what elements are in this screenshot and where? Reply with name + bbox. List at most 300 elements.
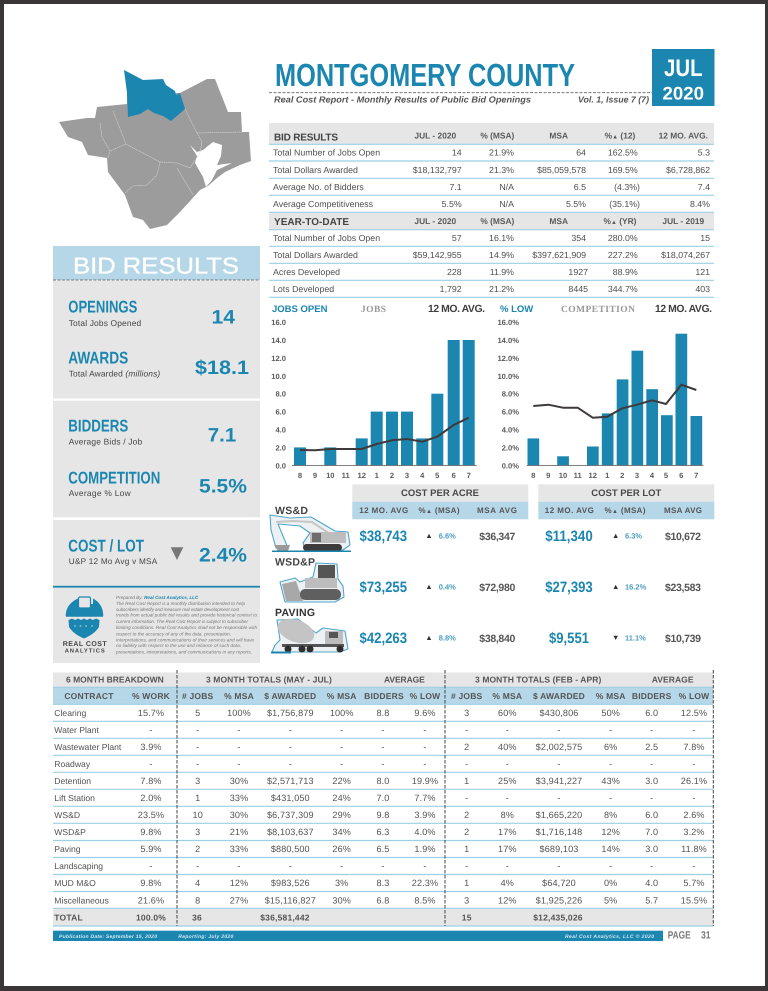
row: Total Number of Jobs Open <box>273 147 380 157</box>
row: roadway: - <box>149 759 153 769</box>
row <box>273 267 710 277</box>
chart: percent low competition: 10 <box>559 471 567 480</box>
row: Average No. of Bidders <box>273 182 364 192</box>
panel heading: BID RESULTS <box>73 252 239 278</box>
row: lift station <box>54 793 696 803</box>
row: WS&D: 6.0 <box>645 810 658 820</box>
column headers: % LOW <box>410 691 441 701</box>
column headers: % MSA <box>224 691 254 701</box>
row: 15 <box>700 233 710 243</box>
stat: cost per lot: U&P 12 Mo Avg v MSA <box>69 557 158 566</box>
row: MUD M&O: 8.3 <box>376 878 390 888</box>
row: detention: 7.8% <box>140 776 162 786</box>
stat: openings: Total Jobs Opened <box>69 318 142 328</box>
column headers: CONTRACT <box>64 691 114 701</box>
row <box>273 199 710 209</box>
footer bar: Real Cost Analytics, LLC © 2020 <box>565 934 654 940</box>
row: water plant: - <box>289 725 292 735</box>
row: landscaping: - <box>149 861 153 871</box>
row: lift station: - <box>692 793 696 803</box>
row: miscellaneous <box>54 896 707 906</box>
row: WSD&P: 2 <box>464 827 469 837</box>
row: paving: $9,551 <box>549 630 589 647</box>
map: Houston region with Montgomery County highlighted <box>59 70 251 229</box>
row: paving: 5.9% <box>140 844 162 854</box>
column headers: MSA AVG <box>664 506 702 515</box>
row: (4.3%) <box>614 182 640 192</box>
row: clearing: $430,806 <box>540 708 578 718</box>
row: water plant: - <box>465 725 468 735</box>
row: miscellaneous: 8.5% <box>414 896 436 906</box>
row: landscaping: - <box>506 861 509 871</box>
row: WS&D: 30% <box>230 810 248 820</box>
row: paving <box>271 607 701 654</box>
chart: jobs open: 6.0 <box>275 408 286 416</box>
row: wastewater plant: 2 <box>464 742 469 752</box>
column headers: MSA AVG <box>477 506 517 515</box>
row: landscaping: - <box>692 861 696 871</box>
table: 6 month breakdown <box>53 670 713 926</box>
row: WSD&P: 12% <box>601 827 620 837</box>
row: 5.5% <box>566 199 586 209</box>
group headers: AVERAGE <box>652 674 694 684</box>
page number: 31 <box>701 930 711 942</box>
chart: percent low competition: 6 <box>679 471 683 480</box>
chart: percent low competition: 2 <box>620 471 624 480</box>
row: water plant: - <box>692 725 696 735</box>
row: N/A <box>499 199 514 209</box>
row: 7.1 <box>449 182 462 192</box>
stat: competition <box>68 468 247 498</box>
row: 6.5 <box>574 182 586 192</box>
row: 64 <box>576 147 586 157</box>
stat: cost per lot: 2.4% <box>199 544 247 566</box>
row: 8445 <box>568 284 588 294</box>
chart: jobs open: 5 <box>435 471 440 480</box>
row: wastewater plant <box>54 742 705 752</box>
chart: jobs open <box>271 304 485 480</box>
header: year to date: JUL - 2020 <box>414 216 457 226</box>
header: bid results <box>274 130 708 144</box>
column headers: 12 MO. AVG <box>359 506 408 515</box>
row: 354 <box>571 233 586 243</box>
header: bid results: % (MSA) <box>480 130 514 140</box>
chart: percent low competition: 0.0% <box>502 461 519 470</box>
heading: cost per lot: COST PER LOT <box>591 488 661 499</box>
stat: bidders <box>68 416 236 447</box>
row: WS&D: 23.5% <box>138 810 164 820</box>
logo text: REAL COST <box>63 641 107 648</box>
row: wastewater plant: 2.5 <box>645 742 658 752</box>
chart heading: JOBS OPEN <box>272 304 328 315</box>
column headers: %▲ (MSA) <box>418 506 460 515</box>
row: roadway: - <box>423 759 427 769</box>
disclaimer text: respect to the accuracy of any of the data, presentation, <box>116 632 231 636</box>
row: WS&D: 6.6% <box>439 532 456 541</box>
row: WSD&P: 16.2% <box>625 583 647 592</box>
row: WSD&P: $8,103,637 <box>267 827 314 837</box>
header: year to date: JUL - 2019 <box>662 216 705 226</box>
row: wastewater plant: - <box>340 742 343 752</box>
chart: jobs open: 2 <box>390 471 394 480</box>
chart: percent low competition: 12.0% <box>497 354 519 363</box>
row: WSD&P: $72,980 <box>479 582 515 594</box>
row: Average Competitiveness <box>273 199 374 209</box>
row: MUD M&O: 4 <box>195 878 200 888</box>
row: lift station: Lift Station <box>54 793 95 803</box>
row: WSD&P: 3.2% <box>683 827 705 837</box>
row: paving: 8.8% <box>439 634 456 643</box>
row: total: $36,581,442 <box>260 912 310 922</box>
column headers: 12 MO. AVG <box>545 506 594 515</box>
row: MUD M&O: MUD M&O <box>54 878 96 888</box>
row: clearing: 12.5% <box>681 708 707 718</box>
row: miscellaneous: 8 <box>195 896 200 906</box>
stat: awards <box>68 349 249 379</box>
chart: percent low competition: 16.0% <box>497 318 519 327</box>
row: miscellaneous: $15,116,827 <box>265 896 316 906</box>
row: total: $12,435,026 <box>533 912 583 922</box>
column headers <box>359 506 702 515</box>
row: WSD&P: 7.0 <box>645 827 658 837</box>
row <box>273 250 710 260</box>
row: water plant: - <box>149 725 153 735</box>
row: clearing: 15.7% <box>138 708 164 718</box>
row: paving: 11.8% <box>681 844 707 854</box>
row: paving: 17% <box>498 844 517 854</box>
row: 8.4% <box>690 199 710 209</box>
row: MUD M&O: 1 <box>464 878 469 888</box>
row: 88.9% <box>613 267 638 277</box>
row: detention: 43% <box>601 776 620 786</box>
row: wastewater plant: - <box>237 742 241 752</box>
row: MUD M&O <box>54 878 705 888</box>
chart: jobs open: 14.0 <box>271 336 286 345</box>
row: detention: $3,941,227 <box>536 776 582 786</box>
table: bid results <box>269 123 714 297</box>
row: WS&D: $10,672 <box>665 531 701 543</box>
row: miscellaneous: 27% <box>230 896 248 906</box>
row: paving: 26% <box>332 844 351 854</box>
header: year to date <box>274 216 705 228</box>
row: roadway: - <box>289 759 292 769</box>
row: lift station: 1 <box>195 793 200 803</box>
chart: jobs open: 1 <box>375 471 380 480</box>
chart heading <box>500 304 712 315</box>
row: detention: 1 <box>464 776 469 786</box>
group headers: 6 MONTH BREAKDOWN <box>66 674 164 684</box>
row: miscellaneous: 30% <box>332 896 351 906</box>
row: lift station: $431,050 <box>271 793 310 803</box>
column headers: % MSA <box>596 691 626 701</box>
row: clearing: $1,756,879 <box>267 708 314 718</box>
title: MONTGOMERY COUNTY <box>275 57 575 93</box>
row: 227.2% <box>608 250 638 260</box>
chart: percent low competition: 2.0% <box>502 444 519 452</box>
stat: competition: COMPETITION <box>68 468 160 487</box>
footer bar: Publication Date: September 15, 2020 <box>59 934 157 940</box>
row: wastewater plant: 40% <box>498 742 517 752</box>
row: lift station: 24% <box>332 793 351 803</box>
row: WSD&P: WSD&P <box>54 827 86 837</box>
row: detention: Detention <box>54 776 91 786</box>
chart: jobs open: 10 <box>326 471 335 480</box>
row: WS&D: 10 <box>193 810 203 820</box>
stat: bidders: 7.1 <box>208 425 236 447</box>
row: MUD M&O: 12% <box>230 878 248 888</box>
row: 1,792 <box>440 284 462 294</box>
row: wastewater plant: $2,002,575 <box>536 742 582 752</box>
chart heading: COMPETITION <box>561 305 635 315</box>
row: roadway: Roadway <box>54 759 91 769</box>
row: water plant <box>54 725 696 735</box>
row: miscellaneous: 5.7 <box>645 896 658 906</box>
chart: percent low competition: 10.0% <box>497 372 519 381</box>
row: lift station: - <box>609 793 612 803</box>
row: 16.1% <box>489 233 514 243</box>
row: roadway: - <box>381 759 385 769</box>
county: Montgomery <box>124 70 185 121</box>
row: 57 <box>452 233 462 243</box>
row: WS&D <box>270 505 701 552</box>
row: paving: $10,739 <box>665 633 701 645</box>
row: detention: 26.1% <box>681 776 707 786</box>
row: detention: 8.0 <box>376 776 390 786</box>
chart: percent low competition <box>497 304 712 480</box>
chart: jobs open: 7 <box>467 471 471 480</box>
row <box>273 233 710 243</box>
row: WS&D: 2 <box>464 810 469 820</box>
row: wastewater plant: - <box>381 742 385 752</box>
row: landscaping: Landscaping <box>54 861 103 871</box>
row: paving: 33% <box>230 844 248 854</box>
row: 11.9% <box>490 267 514 277</box>
stat: competition: Average % Low <box>69 488 132 498</box>
header: year to date: % (MSA) <box>480 216 514 226</box>
disclaimer text: current information. The Real Cost Report is subject to subscriber <box>116 619 248 624</box>
row: paving: 2 <box>195 844 200 854</box>
row: detention: 25% <box>498 776 517 786</box>
row: water plant: - <box>196 725 199 735</box>
row: landscaping: - <box>381 861 385 871</box>
stat: cost per lot <box>68 537 247 566</box>
row: 5.3 <box>698 147 710 157</box>
row: WS&D: $11,340 <box>545 528 593 545</box>
chart: jobs open: 4 <box>420 471 425 480</box>
row: paving: $689,103 <box>540 844 578 854</box>
chart: percent low competition: 11 <box>574 471 582 480</box>
row: landscaping: - <box>609 861 612 871</box>
row: total: 36 <box>192 912 202 922</box>
chart: jobs open: 8 <box>298 471 302 480</box>
row: landscaping: - <box>423 861 427 871</box>
row: paving: Paving <box>54 844 81 854</box>
group headers <box>66 674 694 684</box>
row: 403 <box>695 284 710 294</box>
header: bid results: MSA <box>549 130 568 140</box>
row: (35.1%) <box>609 199 640 209</box>
row: clearing: 3 <box>464 708 469 718</box>
column headers: % MSA <box>327 691 357 701</box>
icon: down triangle <box>171 547 183 560</box>
header: year to date: MSA <box>549 216 568 226</box>
panel: publisher note <box>53 586 260 663</box>
row: water plant: - <box>381 725 385 735</box>
row: paving: 6.5 <box>376 844 390 854</box>
row: MUD M&O: 5.7% <box>683 878 705 888</box>
chart heading: 12 MO. AVG. <box>655 304 712 315</box>
row: clearing: 60% <box>498 708 517 718</box>
row: WS&D: $38,743 <box>360 528 407 545</box>
row: total <box>54 912 583 922</box>
issue label: Vol. 1, Issue 7 (7) <box>578 95 649 105</box>
stat: openings: 14 <box>212 306 235 328</box>
chart heading: JOBS <box>361 305 386 315</box>
row: wastewater plant: - <box>196 742 199 752</box>
page number: PAGE <box>668 930 691 942</box>
row: roadway: - <box>609 759 612 769</box>
row: landscaping: - <box>237 861 241 871</box>
date badge: JUL <box>664 55 703 82</box>
row: clearing <box>54 708 707 718</box>
column headers: BIDDERS <box>364 691 404 701</box>
disclaimer text: no liability with respect to the use and reliance of such data, <box>116 643 241 648</box>
chart: percent low competition: 8.0% <box>502 390 519 398</box>
row: clearing: 100% <box>330 708 354 718</box>
row: 228 <box>447 267 462 277</box>
row: detention: 3.0 <box>645 776 658 786</box>
row: MUD M&O: $983,526 <box>271 878 310 888</box>
disclaimer text <box>115 595 257 654</box>
row: Lots Developed <box>273 284 334 294</box>
row: N/A <box>499 182 514 192</box>
row: 121 <box>695 267 710 277</box>
row: 14 <box>452 147 462 157</box>
heading: cost per acre: COST PER ACRE <box>401 488 479 499</box>
row: water plant: - <box>423 725 427 735</box>
stat: openings: OPENINGS <box>68 298 137 317</box>
row: water plant: - <box>340 725 343 735</box>
logo text: ANALYTICS <box>65 647 105 654</box>
chart: percent low competition: 6.0% <box>502 408 519 416</box>
chart: percent low competition: 3 <box>635 471 639 480</box>
row: 14.9% <box>489 250 514 260</box>
page number <box>668 930 711 942</box>
row: miscellaneous: Miscellaneous <box>54 896 109 906</box>
row: WS&D: 6.3% <box>625 532 642 541</box>
chart: percent low competition: 7 <box>694 471 698 480</box>
row: clearing: 9.6% <box>414 708 436 718</box>
row: MUD M&O: $64,720 <box>542 878 576 888</box>
row: detention: 19.9% <box>412 776 438 786</box>
row: water plant: Water Plant <box>54 725 99 735</box>
row: miscellaneous: 21.6% <box>138 896 164 906</box>
row: water plant: - <box>557 725 561 735</box>
row: MUD M&O: 9.8% <box>140 878 162 888</box>
disclaimer text: limiting conditions. Real Cost Analytics shall not be responsible with <box>116 625 257 630</box>
row: water plant: - <box>237 725 241 735</box>
chart: jobs open: 12.0 <box>271 354 286 363</box>
row: detention: 30% <box>230 776 248 786</box>
row: WSD&P: $27,393 <box>545 579 593 596</box>
chart: jobs open: 16.0 <box>271 318 286 327</box>
row: lift station: - <box>650 793 653 803</box>
column headers: % WORK <box>132 691 171 701</box>
row: 280.0% <box>608 233 638 243</box>
subtitle: Real Cost Report - Monthly Results of Public Bid Openings <box>274 95 531 105</box>
row: miscellaneous: 3 <box>464 896 469 906</box>
row: clearing: 50% <box>601 708 620 718</box>
row: WSD&P: 17% <box>498 827 517 837</box>
row: landscaping: - <box>465 861 468 871</box>
footer bar: Reporting: July 2020 <box>178 934 234 940</box>
chart: jobs open: 10.0 <box>271 372 286 381</box>
row: detention: 3 <box>195 776 200 786</box>
column headers: $ AWARDED <box>533 691 585 701</box>
row: $18,074,267 <box>661 250 710 260</box>
row: WSD&P: $1,716,148 <box>536 827 582 837</box>
row: wastewater plant: 6% <box>604 742 617 752</box>
row: 169.5% <box>608 165 638 175</box>
icon: hard hat logo <box>66 597 103 638</box>
chart: percent low competition: 9 <box>546 471 550 480</box>
chart heading <box>272 304 485 315</box>
column headers: % MSA <box>492 691 522 701</box>
chart: jobs open: 6 <box>452 471 456 480</box>
row: MUD M&O: 22.3% <box>412 878 438 888</box>
row: $18,132,797 <box>413 165 462 175</box>
row: water plant: - <box>506 725 509 735</box>
stat: openings <box>68 298 235 328</box>
row: WSD&P: 34% <box>332 827 351 837</box>
disclaimer text: interpretations, and communications of their services and will have <box>116 638 254 642</box>
row: WS&D: 8% <box>604 810 617 820</box>
column headers <box>64 691 710 701</box>
row: roadway: - <box>506 759 509 769</box>
row: lift station: 2.0% <box>140 793 162 803</box>
row: Total Number of Jobs Open <box>273 233 380 243</box>
row: clearing: 6.0 <box>645 708 658 718</box>
chart: percent low competition: 1 <box>605 471 610 480</box>
column headers: $ AWARDED <box>264 691 316 701</box>
row: paving: 3.0 <box>645 844 658 854</box>
column headers: %▲ (MSA) <box>604 506 646 515</box>
chart: jobs open: 9 <box>313 471 317 480</box>
row: Acres Developed <box>273 267 340 277</box>
row: detention: 22% <box>332 776 351 786</box>
row: WS&D: WS&D <box>54 810 80 820</box>
row: $6,728,862 <box>666 165 710 175</box>
row: WS&D: $6,737,309 <box>267 810 314 820</box>
header: year to date: YEAR-TO-DATE <box>274 217 349 228</box>
row: roadway: - <box>465 759 468 769</box>
row: MUD M&O: 4.0 <box>645 878 658 888</box>
stat: competition: 5.5% <box>199 475 247 497</box>
stat: cost per lot: COST / LOT <box>68 537 144 556</box>
row: MUD M&O: 0% <box>604 878 617 888</box>
stat: bidders: BIDDERS <box>68 416 128 435</box>
row: wastewater plant: 3.9% <box>140 742 162 752</box>
row: paving: PAVING <box>275 607 315 619</box>
row: wastewater plant: Wastewater Plant <box>54 742 122 752</box>
group headers: AVERAGE <box>384 674 425 684</box>
row: detention <box>54 776 707 786</box>
row: landscaping: - <box>650 861 653 871</box>
row: wastewater plant: - <box>423 742 427 752</box>
row: landscaping: - <box>289 861 292 871</box>
chart: jobs open: 2.0 <box>275 444 286 452</box>
icon: bulldozer <box>280 563 344 602</box>
